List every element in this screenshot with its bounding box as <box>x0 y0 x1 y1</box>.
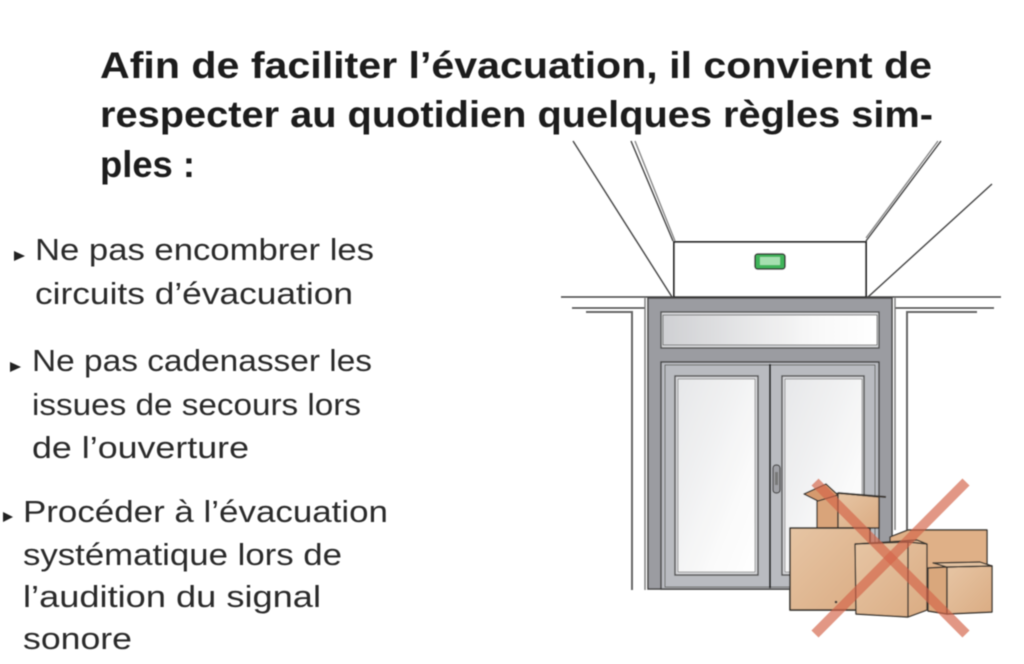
cardboard boxes <box>790 484 992 617</box>
right glass <box>782 376 864 575</box>
door frame <box>648 298 892 589</box>
icon: green exit sign <box>755 254 785 269</box>
bullet list item: cadenasser: de l’ouverture <box>32 430 249 465</box>
bullet list item: procéder <box>3 494 388 656</box>
double door <box>661 362 879 589</box>
bullet list item: procéder: Procéder à l’évacuation <box>23 494 388 529</box>
small right box <box>928 562 992 614</box>
title: Afin de faciliter l’évacuation, il convient de <box>100 45 932 86</box>
illustration: evacuation door scene <box>561 141 1001 634</box>
door handle <box>773 465 780 493</box>
lintel box <box>674 242 866 297</box>
title: ples : <box>100 144 195 185</box>
bullet list item: cadenasser <box>10 343 372 465</box>
bullet list item: encombrer: circuits d’évacuation <box>35 276 353 311</box>
bullet list item: procéder: systématique lors de <box>23 537 342 572</box>
icon: prohibition cross <box>815 482 966 634</box>
top open box <box>804 484 886 528</box>
transom window <box>661 312 879 348</box>
bullet list item: encombrer <box>14 232 374 311</box>
centre box <box>855 540 927 617</box>
large box <box>790 528 870 610</box>
bullet list item: cadenasser: issues de secours lors <box>32 387 361 422</box>
bullet list item: procéder: sonore <box>23 621 132 656</box>
title: respecter au quotidien quelques règles sim- <box>100 94 933 135</box>
bullet list item: cadenasser: Ne pas cadenasser les <box>32 343 372 378</box>
bullet list item: encombrer: Ne pas encombrer les <box>35 232 374 267</box>
back right box <box>890 530 987 570</box>
bullet list item: procéder: l’audition du signal <box>23 579 321 614</box>
title <box>100 45 933 185</box>
corridor ceiling and walls <box>561 141 1001 590</box>
left glass <box>675 376 758 575</box>
